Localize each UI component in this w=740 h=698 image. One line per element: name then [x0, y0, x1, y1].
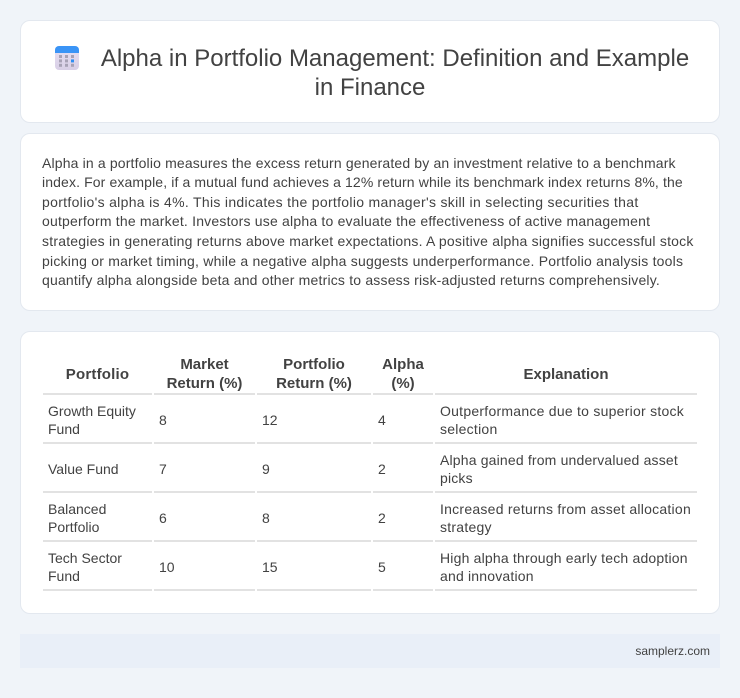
- row: Value Fund: Value Fund: [48, 461, 119, 477]
- table header: Portfolio Return: Return (%): [276, 375, 352, 392]
- row: Tech Sector Fund: Fund: [48, 568, 80, 584]
- title: [101, 45, 689, 101]
- row: Balanced Portfolio: strategy: [440, 519, 492, 535]
- row: Tech Sector Fund: High alpha through early tech adoption: [440, 550, 688, 566]
- row: Growth Equity Fund: Fund: [48, 421, 80, 437]
- table header: Alpha: (%): [391, 375, 415, 392]
- icon: calendar: [55, 46, 79, 70]
- description text: portfolio's alpha is 4%. This indicates the portfolio manager's skill in selecting securities that: [42, 194, 639, 210]
- row: Growth Equity Fund: 4: [378, 412, 386, 428]
- description text: strategies in generating returns above market expectations. A positive alpha signifies successful stock: [42, 233, 694, 249]
- row: Growth Equity Fund: Outperformance due to superior stock: [440, 403, 684, 419]
- panel: table: [20, 331, 720, 614]
- row: Value Fund: 7: [159, 461, 167, 477]
- row: Balanced Portfolio: 6: [159, 510, 167, 526]
- table header: Market Return: Market: [180, 356, 229, 373]
- row: Balanced Portfolio: Balanced: [48, 501, 106, 517]
- row: Balanced Portfolio: [48, 501, 691, 535]
- row: Balanced Portfolio: Portfolio: [48, 519, 99, 535]
- table header: Portfolio Return: [276, 356, 352, 392]
- table header: Alpha: [382, 356, 424, 392]
- row: Growth Equity Fund: 12: [262, 412, 278, 428]
- table header: Portfolio Return: Portfolio: [283, 356, 345, 373]
- row: Value Fund: Alpha gained from undervalued asset: [440, 452, 678, 468]
- description text: outperform the market. Investors use alpha to evaluate the effectiveness of active management: [42, 213, 650, 229]
- row: Tech Sector Fund: Tech Sector: [48, 550, 122, 566]
- row: Tech Sector Fund: [48, 550, 688, 584]
- description text: picking or market timing, while a negative alpha suggests underperformance. Portfolio analysis tools: [42, 253, 683, 269]
- table header: Alpha: Alpha: [382, 356, 424, 373]
- row: Value Fund: picks: [440, 470, 473, 486]
- table header: Market Return: Return (%): [167, 375, 242, 392]
- footer bar: [20, 634, 720, 668]
- description text: quantify alpha alongside beta and other metrics to assess risk-adjusted returns comprehensively.: [42, 272, 660, 288]
- row: Tech Sector Fund: 5: [378, 559, 386, 575]
- description text: index. For example, if a mutual fund achieves a 12% return while its benchmark index returns 8%, the: [42, 174, 683, 190]
- row: Tech Sector Fund: 15: [262, 559, 278, 575]
- table header: Explanation: Explanation: [523, 366, 608, 383]
- row: Tech Sector Fund: and innovation: [440, 568, 534, 584]
- row: Balanced Portfolio: Increased returns from asset allocation: [440, 501, 691, 517]
- row: Growth Equity Fund: 8: [159, 412, 167, 428]
- title: in Finance: [315, 74, 425, 101]
- table: [43, 356, 697, 591]
- table header: Portfolio: Portfolio: [66, 366, 129, 383]
- row: Tech Sector Fund: 10: [159, 559, 175, 575]
- description text: Alpha in a portfolio measures the excess return generated by an investment relative to a benchmark: [42, 155, 676, 171]
- panel: description: [20, 133, 720, 311]
- footer text: samplerz.com: [635, 644, 710, 658]
- row: Growth Equity Fund: selection: [440, 421, 498, 437]
- row: Balanced Portfolio: 8: [262, 510, 270, 526]
- description text: [42, 155, 694, 288]
- row: Value Fund: 2: [378, 461, 386, 477]
- row: Value Fund: [48, 452, 678, 486]
- row: Growth Equity Fund: [48, 403, 684, 437]
- row: Value Fund: 9: [262, 461, 270, 477]
- title: Alpha in Portfolio Management: Definition and Example: [101, 45, 689, 72]
- row: Balanced Portfolio: 2: [378, 510, 386, 526]
- table header: Market Return: [167, 356, 242, 392]
- header panel: [20, 20, 720, 123]
- row: Growth Equity Fund: Growth Equity: [48, 403, 136, 419]
